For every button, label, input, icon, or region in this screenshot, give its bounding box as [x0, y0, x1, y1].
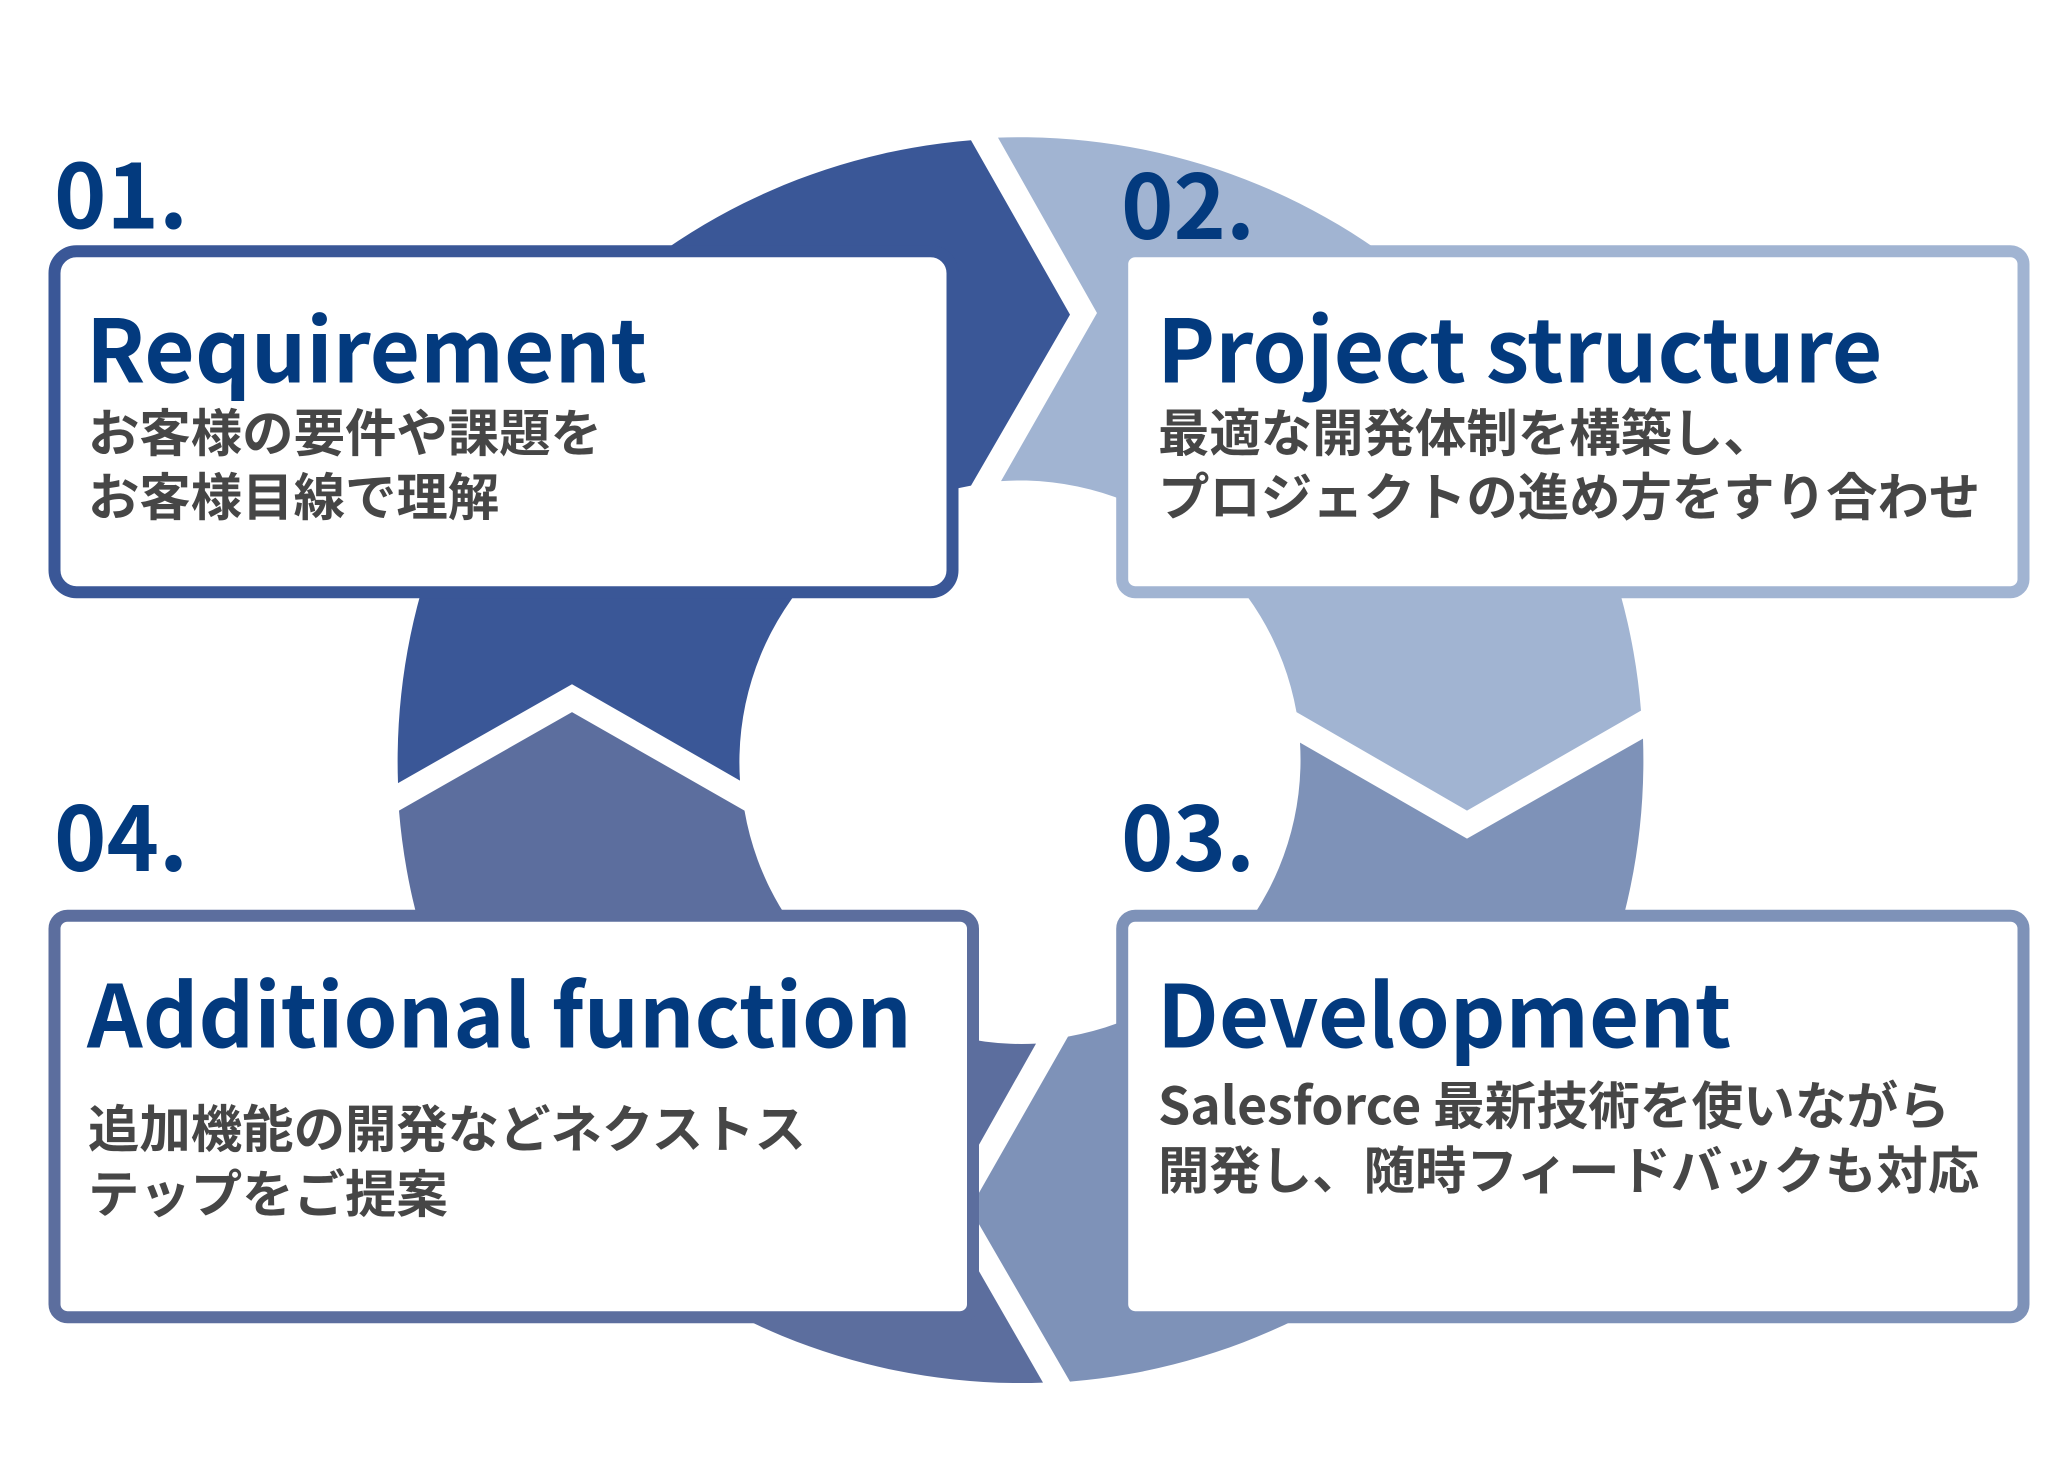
description 01: お客様目線で理解	[88, 456, 499, 530]
card frame 01	[54, 251, 952, 592]
number 04: 04.	[54, 768, 188, 897]
description 03: 開発し、随時フィードバックも対応	[1158, 1129, 1979, 1204]
heading: Additional function: Additional function	[86, 946, 912, 1072]
panel: 03 Development	[1121, 768, 2024, 1317]
card frame 02	[1122, 251, 2024, 592]
heading: Development: Development	[1157, 948, 1731, 1072]
ring segment 2 arrow	[998, 137, 1641, 811]
panel: 02 Project structure	[1121, 136, 2024, 592]
number 02: 02.	[1121, 136, 1255, 265]
card frame 03	[1122, 916, 2024, 1317]
cycle ring	[398, 137, 1643, 1383]
panel: 01 Requirement	[54, 126, 952, 592]
ring segment 4 arrow	[399, 712, 1043, 1383]
heading: Requirement: Requirement	[86, 282, 647, 408]
ring segment 3 arrow	[970, 739, 1643, 1382]
description 01: お客様の要件や課題を	[88, 391, 602, 466]
description 02: 最適な開発体制を構築し、	[1158, 391, 1775, 466]
description 03: Salesforce 最新技術を使いながら	[1158, 1064, 1950, 1140]
description 02: プロジェクトの進め方をすり合わせ	[1158, 456, 1980, 530]
panel: 04 Additional function	[54, 768, 973, 1317]
number 01: 01.	[54, 126, 188, 254]
description 04: 追加機能の開発などネクストス	[88, 1088, 806, 1162]
ring segment 1 arrow	[398, 140, 1070, 783]
card frame 04	[54, 916, 973, 1317]
description 04: テップをご提案	[88, 1152, 448, 1228]
heading: Project structure: Project structure	[1157, 282, 1883, 408]
number 03: 03.	[1121, 768, 1255, 897]
